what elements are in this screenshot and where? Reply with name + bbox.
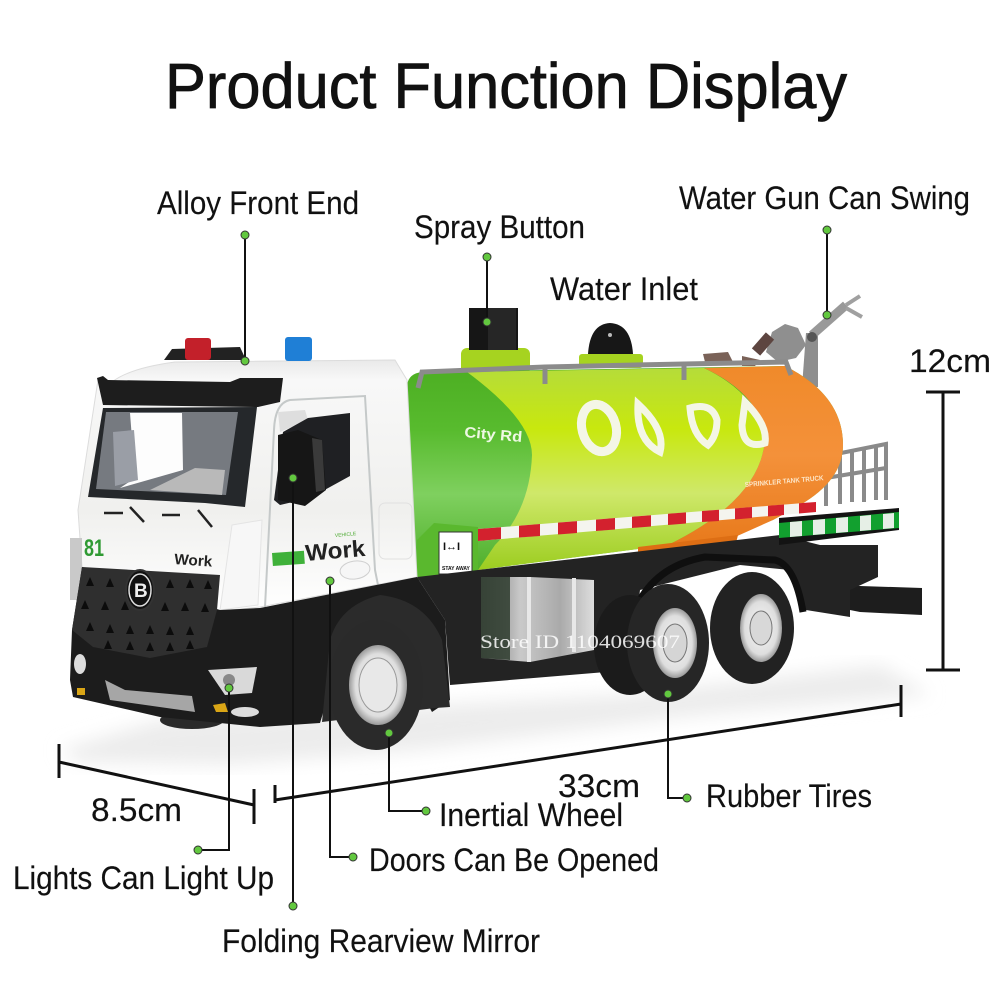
spray button xyxy=(461,308,530,374)
watermark: Store ID 1104069607 xyxy=(480,632,680,653)
leader: inertial wheel xyxy=(385,729,430,815)
leader: lights xyxy=(194,684,233,854)
door outline xyxy=(265,396,378,607)
label: 12cm: 12cm xyxy=(909,343,991,379)
dimension: length xyxy=(275,685,901,803)
grille xyxy=(72,567,220,658)
leaf graphics xyxy=(576,400,765,456)
door work text: VEHICLE xyxy=(335,531,357,539)
roof lights xyxy=(164,337,312,361)
label: inertial wheel: Inertial Wheel xyxy=(439,797,623,833)
rear deck xyxy=(779,508,899,545)
label: alloy front end: Alloy Front End xyxy=(157,185,359,221)
mirror xyxy=(278,430,326,506)
water gun xyxy=(703,296,862,387)
door work text: Work xyxy=(304,535,366,566)
fuel tank xyxy=(481,577,594,662)
badge: B xyxy=(134,581,148,602)
label: folding rearview mirror: Folding Rearview Mirror xyxy=(222,923,540,959)
label: doors can be opened: Doors Can Be Opened xyxy=(369,842,659,878)
label: spray button: Spray Button xyxy=(414,209,585,245)
door handle xyxy=(339,559,371,581)
leader: doors xyxy=(326,577,357,861)
81 number: 81 xyxy=(84,535,104,562)
dimension: height xyxy=(926,392,960,670)
chassis xyxy=(417,535,878,685)
green panel with sign: STAY AWAY xyxy=(442,566,471,572)
sun visor xyxy=(97,376,283,407)
label: rubber tires: Rubber Tires xyxy=(706,778,872,814)
red and white stripe xyxy=(478,502,816,541)
wipers xyxy=(104,507,212,527)
water inlet xyxy=(579,323,643,368)
title: Product Function Display xyxy=(165,50,847,122)
rear handrail xyxy=(826,444,886,506)
door window xyxy=(274,413,350,505)
leader: mirror xyxy=(289,474,297,910)
truck xyxy=(70,296,922,750)
city rd text: City Rd xyxy=(464,424,523,446)
tank handrail xyxy=(418,362,791,388)
windshield xyxy=(88,407,257,507)
headlight xyxy=(74,654,259,717)
side marker xyxy=(70,538,82,600)
label: water inlet: Water Inlet xyxy=(550,271,698,307)
tank xyxy=(407,366,843,580)
front work text: Work xyxy=(174,551,213,571)
label: 8.5cm: 8.5cm xyxy=(91,792,182,828)
sprinkler text: SPRINKLER TANK TRUCK xyxy=(745,475,824,489)
lower cab xyxy=(70,567,450,727)
door work text xyxy=(272,531,366,566)
dimension: width xyxy=(59,744,254,824)
cab body xyxy=(70,360,417,611)
rear wheel near xyxy=(594,584,709,702)
label: water gun can swing: Water Gun Can Swing xyxy=(679,180,970,216)
under front axle xyxy=(160,711,224,729)
badge xyxy=(126,570,154,610)
leader: rubber tires xyxy=(664,690,691,802)
leader: spray button xyxy=(483,253,491,326)
green panel with sign: I↔I xyxy=(443,541,460,553)
front wheel xyxy=(329,620,423,750)
cab side panel xyxy=(379,503,412,559)
green panel with sign xyxy=(417,523,478,580)
fender xyxy=(322,595,450,722)
rear bumper xyxy=(830,585,922,615)
label: lights can light up: Lights Can Light Up xyxy=(13,860,274,896)
door frame piece xyxy=(278,410,308,432)
label: 33cm: 33cm xyxy=(558,768,640,804)
ground shadow xyxy=(60,665,930,765)
rear wheel far xyxy=(710,572,794,684)
bumper light bar xyxy=(105,680,195,712)
leader: alloy front end xyxy=(241,231,249,365)
leader: water gun xyxy=(823,226,831,319)
a-pillar panel xyxy=(220,520,262,610)
